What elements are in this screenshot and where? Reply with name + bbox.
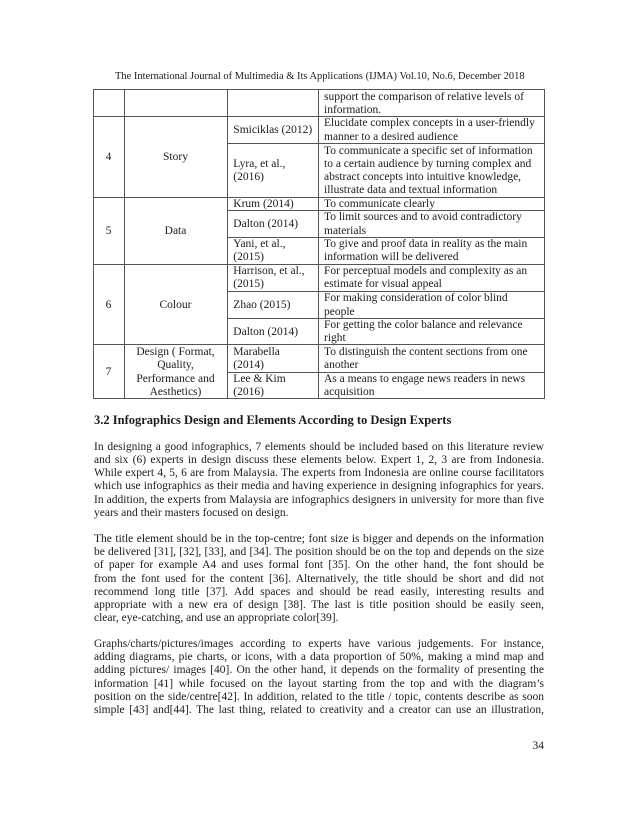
table row 6: Colour: Dalton (2014) xyxy=(233,326,298,338)
table row: continuation from previous page: information. xyxy=(324,104,381,116)
table row 4: Story: abstract concepts into intuitive knowledge, xyxy=(324,171,521,183)
paragraph: title element xyxy=(94,533,544,624)
table row: continuation from previous page xyxy=(324,91,524,116)
table row 4: Story: Lyra, et al., xyxy=(233,158,285,170)
table row 6: Colour: (2015) xyxy=(233,278,264,290)
table row 7: Design: another xyxy=(324,359,358,371)
paragraph: graphs and images: simple [43] and[44]. The last thing, related to creativity and a creator can use an illustration, xyxy=(94,704,544,716)
table row 7: Design: 7 xyxy=(106,366,111,378)
table row 7: Design: acquisition xyxy=(324,386,374,398)
paragraph: experts introduction: While expert 4, 5, 6 are from Malaysia. The experts from Indonesia are online course facilitators xyxy=(94,467,544,479)
table row 7: Design: Marabella xyxy=(233,346,280,358)
table row 5: Data: (2015) xyxy=(233,251,264,263)
table row 5: Data: Krum (2014) xyxy=(233,198,294,210)
table row 6: Colour: people xyxy=(324,306,355,318)
paragraph: graphs and images: adding pictures/ images [40]. On the other hand, it depends on the formality of presenting the xyxy=(94,664,544,676)
table row 7: Design xyxy=(106,346,528,398)
table row 7: Design: To distinguish the content sections from one xyxy=(324,346,528,358)
table row 7: Design: Quality, xyxy=(157,359,194,371)
paragraph: experts introduction: In designing a good infographics, 7 elements should be included based on this literature review xyxy=(94,441,544,453)
paragraph: title element: clear, eye-catching, and use an appropriate color[39]. xyxy=(94,612,338,624)
paragraph: experts introduction: which use infographics as their media and having experience in designing infographics for years. xyxy=(94,480,544,492)
table row 4: Story: Story xyxy=(163,151,188,163)
table row 5: Data: To give and proof data in reality as the main xyxy=(324,238,527,250)
paragraph: experts introduction: In addition, the experts from Malaysia are infographics designers in university for more than five xyxy=(94,494,544,506)
paragraph: graphs and images: position on the side/centre[42]. In addition, related to the title / topic, contents describe as soon xyxy=(94,691,544,703)
paragraph: graphs and images: adding diagrams, pie charts, or icons, with a data proportion of 50%, making a mind map and xyxy=(94,651,544,663)
paragraph: title element: from the font used for the content [36]. Alternatively, the title should be short and did not xyxy=(94,573,544,585)
paragraph: experts introduction: years and their masters focused on design. xyxy=(94,507,288,519)
table row 5: Data: Yani, et al., xyxy=(233,238,285,250)
paragraph: graphs and images: Graphs/charts/pictures/images according to experts have various judgements. For instance, xyxy=(94,638,544,650)
table row 6: Colour: Harrison, et al., xyxy=(233,265,305,277)
table row 4: Story: manner to a desired audience xyxy=(324,131,458,143)
section heading: 3.2 Infographics Design and Elements According to Design Experts xyxy=(94,413,451,427)
table row 4: Story: To communicate a specific set of information xyxy=(324,145,533,157)
table row 5: Data xyxy=(106,198,528,263)
table row: continuation from previous page: support the comparison of relative levels of xyxy=(324,91,524,103)
paragraph: title element: The title element should be in the top-centre; font size is bigger and depends on the information xyxy=(94,533,544,545)
table row 7: Design: (2014) xyxy=(233,359,264,371)
table row 5: Data: To limit sources and to avoid contradictory xyxy=(324,211,522,223)
table row 7: Design: Lee & Kim xyxy=(233,373,286,385)
table row 4: Story: Smiciklas (2012) xyxy=(233,124,312,136)
table row 4: Story xyxy=(106,117,535,196)
running header: The International Journal of Multimedia & Its Applications (IJMA) Vol.10, No.6, December 2018 xyxy=(115,71,525,82)
table: infographic elements continued xyxy=(93,89,545,399)
table row 4: Story: illustrate data and textual information xyxy=(324,184,497,196)
table row 6: Colour: For making consideration of color blind xyxy=(324,292,508,304)
table row 6: Colour: 6 xyxy=(106,299,111,311)
table row 7: Design: (2016) xyxy=(233,386,264,398)
table row 6: Colour: estimate for visual appeal xyxy=(324,278,442,290)
paragraph: graphs and images xyxy=(94,638,544,716)
table row 4: Story: to a certain audience by turning complex and xyxy=(324,158,531,170)
table row 7: Design: Performance and xyxy=(136,373,215,385)
paragraph: title element: be delivered [31], [32], [33], and [34]. The position should be on the top and depends on the size xyxy=(94,546,544,558)
table row 5: Data: information will be delivered xyxy=(324,251,458,263)
table row 5: Data: 5 xyxy=(106,225,111,237)
table row 7: Design: Aesthetics) xyxy=(150,386,201,398)
table row 4: Story: (2016) xyxy=(233,171,264,183)
table row 7: Design: Design ( Format, xyxy=(136,346,215,358)
paragraph: graphs and images: information [41] while focused on the layout starting from the top and with the diagram’s xyxy=(94,678,544,690)
table row 4: Story: Elucidate complex concepts in a user-friendly xyxy=(324,117,535,129)
paragraph: experts introduction: and six (6) experts in design discuss these elements below. Expert 1, 2, 3 are from Indonesia. xyxy=(94,454,544,466)
paragraph: title element: recommend long title [37]. Add spaces and should be read easily, interesting results and xyxy=(94,586,544,598)
table row 7: Design: As a means to engage news readers in news xyxy=(324,373,525,385)
table row 5: Data: To communicate clearly xyxy=(324,198,435,210)
table row 5: Data: Dalton (2014) xyxy=(233,218,298,230)
table row 6: Colour: For getting the color balance and relevance xyxy=(324,319,523,331)
table row 5: Data: Data xyxy=(165,225,186,237)
table row 6: Colour xyxy=(106,265,527,344)
table row 5: Data: materials xyxy=(324,225,366,237)
table row 6: Colour: right xyxy=(324,332,346,344)
table row 6: Colour: Colour xyxy=(160,299,191,311)
page number: 34 xyxy=(532,740,544,752)
paragraph: experts introduction xyxy=(94,441,544,519)
table row 6: Colour: Zhao (2015) xyxy=(233,299,290,311)
table row 6: Colour: For perceptual models and complexity as an xyxy=(324,265,527,277)
table row 4: Story: 4 xyxy=(106,151,111,163)
